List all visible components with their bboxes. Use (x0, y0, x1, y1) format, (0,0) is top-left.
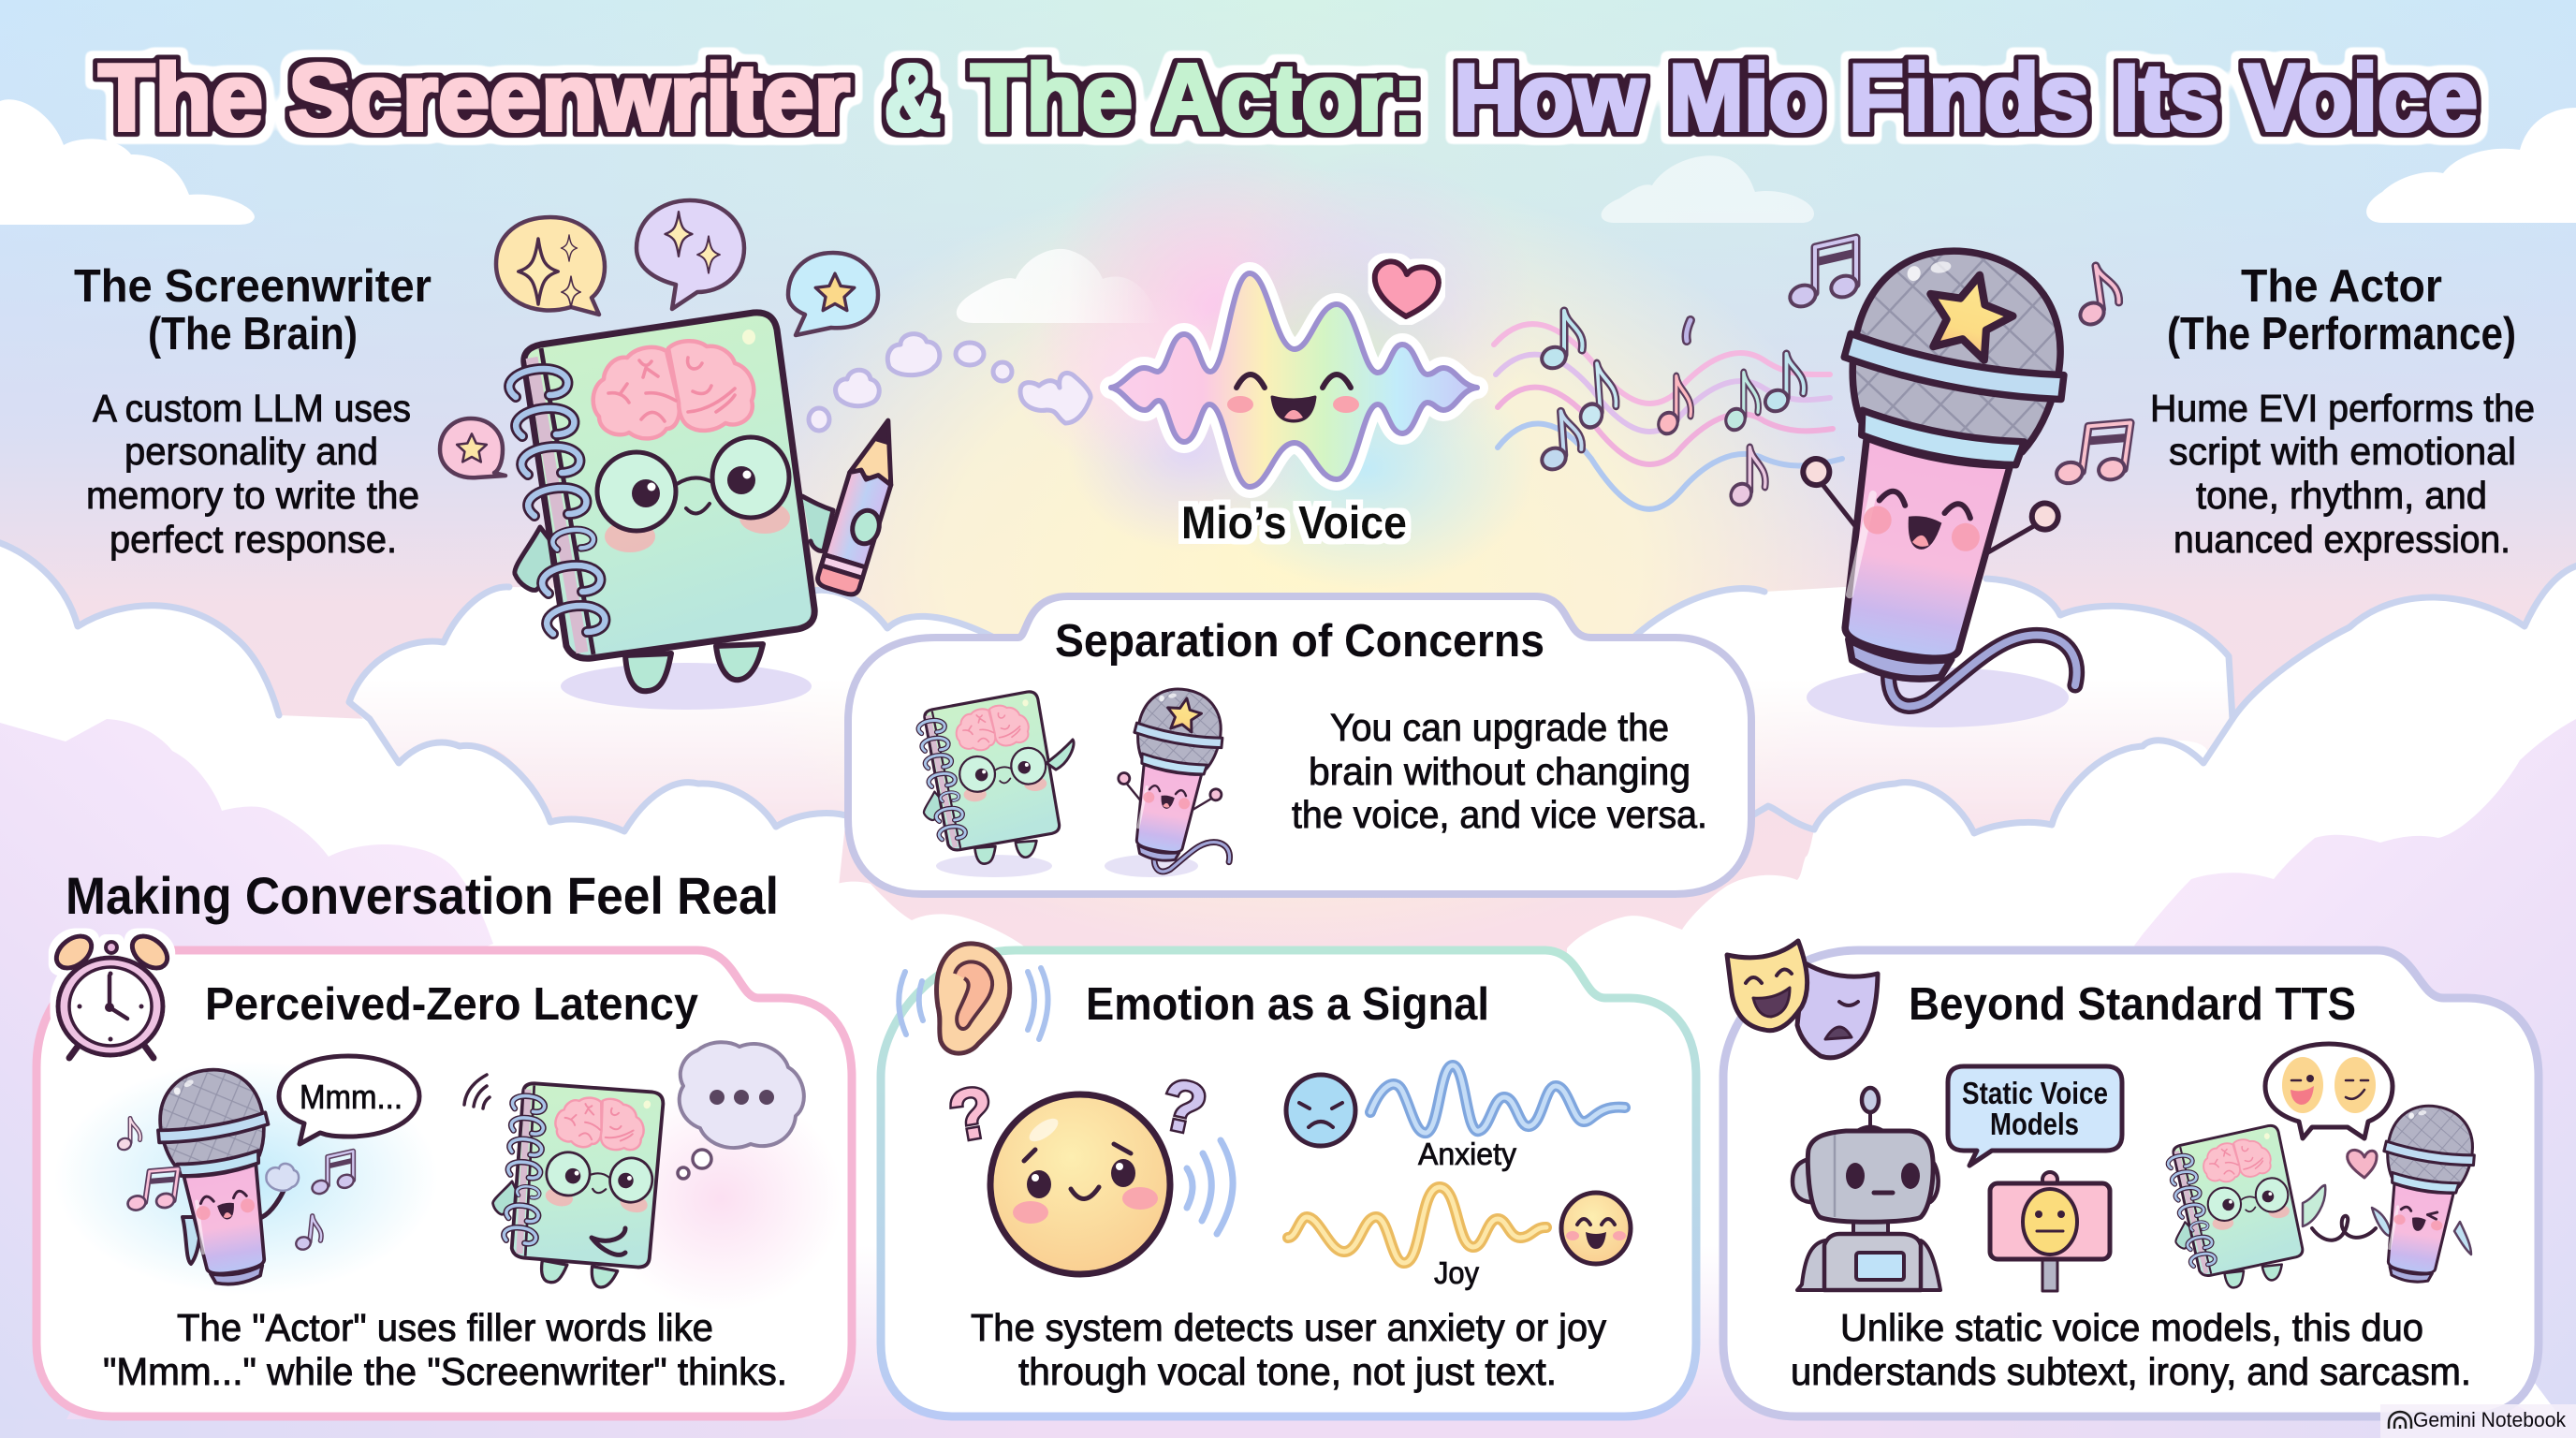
body text (103, 1306, 787, 1393)
panel: the screenwriter text: perfect response. (110, 518, 397, 561)
icon: sad face (1286, 1075, 1355, 1146)
body text: understands subtext, irony, and sarcasm. (1791, 1350, 2471, 1393)
panel: separation of concerns (848, 596, 1751, 894)
panel: the actor text: Hume EVI performs the (2150, 387, 2535, 430)
panel: the screenwriter text: The Screenwriter (74, 261, 432, 312)
icon: ear (899, 944, 1048, 1053)
icon: questioning emoji (944, 1064, 1233, 1274)
cloud: lower right lavender (2134, 719, 2576, 1438)
title: The Screenwriter (98, 46, 850, 151)
body text: the voice, and vice versa. (1292, 793, 1707, 836)
card: emotion as a signal (881, 944, 1696, 1416)
icon: small microphone (1104, 681, 1257, 883)
icon: mic cord (1882, 608, 2084, 737)
icon: theater masks (1727, 941, 1878, 1058)
panel: the actor text: script with emotional (2169, 430, 2516, 473)
icon: happy face (1561, 1193, 1631, 1264)
icon: small notebook (917, 691, 1074, 877)
body text: You can upgrade the (1330, 706, 1669, 749)
character: microphone actor (1763, 228, 2153, 737)
music staff waves (1494, 324, 1842, 509)
panel: the actor text: tone, rhythm, and (2196, 474, 2487, 517)
heading: Emotion as a Signal (1086, 979, 1489, 1030)
cloud: small centre right (1602, 155, 1814, 223)
label: mio's voice: Mio’s Voice (1181, 498, 1407, 549)
body text: The system detects user anxiety or joy (971, 1306, 1606, 1349)
body text: The "Actor" uses filler words like (177, 1306, 713, 1349)
title: The Actor: (971, 46, 1423, 151)
callout: mmm bubble: Mmm... (300, 1078, 402, 1116)
body text (971, 1306, 1606, 1393)
cloud: lower left lavender (0, 719, 493, 1438)
label: anxiety: Anxiety (1418, 1137, 1516, 1171)
character: notebook screenwriter (509, 313, 909, 710)
cloud outline strokes (0, 541, 2576, 833)
title: & (885, 46, 941, 151)
panel: the actor text: nuanced expression. (2174, 518, 2510, 561)
icon: robot (1793, 1088, 1940, 1290)
icon: duo notebook (2166, 1124, 2325, 1292)
heading: Beyond Standard TTS (1909, 979, 2356, 1030)
icon: thinking notebook (464, 1063, 685, 1302)
icon: neutral sign (1990, 1172, 2110, 1291)
heading: Perceived-Zero Latency (205, 979, 698, 1030)
icon: heart (1375, 261, 1439, 316)
chart: anxiety wave (1370, 1065, 1625, 1133)
icon: questioning emoji: ? (944, 1071, 1000, 1157)
title: How Mio Finds Its Voice (1454, 46, 2478, 151)
panel: the screenwriter text (74, 261, 432, 561)
card: perceived-zero latency (37, 930, 852, 1416)
chart: waveform mio's voice (1111, 273, 1477, 487)
body text: "Mmm..." while the "Screenwriter" thinks. (103, 1350, 787, 1393)
callout: mmm bubble (279, 1056, 419, 1144)
chart: joy wave (1288, 1187, 1546, 1263)
icon: alarm clock (51, 930, 173, 1058)
panel: the screenwriter text: personality and (124, 430, 378, 473)
icon: mic with filler (149, 1062, 299, 1292)
bottom lavender strip (0, 1245, 2576, 1438)
cloud bank: upper white fades (0, 541, 2576, 1438)
heading: Separation of Concerns (1055, 616, 1544, 667)
panel: the actor text: (The Performance) (2167, 309, 2516, 360)
panel: the screenwriter text: memory to write the (86, 474, 419, 517)
body text: through vocal tone, not just text. (1018, 1350, 1557, 1393)
callout: emoji bubble (2265, 1044, 2393, 1138)
icon: small heart (2348, 1150, 2377, 1178)
cloud: small centre left (957, 249, 1161, 323)
icon: pencil (802, 414, 909, 597)
body text: Unlike static voice models, this duo (1840, 1306, 2423, 1349)
icon: thought puffs to waveform (809, 334, 1090, 431)
callout: static voice models: Static Voice (1962, 1076, 2108, 1110)
watermark: gemini notebook: Gemini Notebook (2413, 1408, 2567, 1431)
icon: duo microphone (2364, 1099, 2481, 1288)
panel: the screenwriter text: A custom LLM uses (93, 387, 411, 430)
body text: brain without changing (1309, 750, 1690, 793)
cloud: top left (0, 99, 255, 225)
panel: the actor text (2150, 261, 2535, 561)
panel: the screenwriter text: (The Brain) (148, 309, 358, 360)
body text (1791, 1306, 2471, 1393)
body text (1292, 706, 1707, 836)
icon: thought bubbles above notebook (440, 200, 878, 477)
panel: the actor text: The Actor (2241, 261, 2442, 312)
callout: static voice models: Models (1990, 1107, 2079, 1141)
squiggle (2312, 1216, 2376, 1240)
callout: static voice models (1948, 1066, 2122, 1166)
cloud: top right (2366, 108, 2576, 223)
card: beyond standard tts (1723, 941, 2539, 1416)
icon: music notes (116, 1118, 356, 1254)
title (98, 46, 2478, 151)
watermark: gemini notebook (2380, 1404, 2576, 1438)
label: joy: Joy (1434, 1255, 1479, 1290)
icon: music notes (1536, 238, 2134, 508)
callout: thinking cloud (678, 1042, 804, 1179)
icon: questioning emoji: ? (1154, 1064, 1213, 1151)
heading: making conversation feel real: Making Conversation Feel Real (66, 866, 779, 925)
